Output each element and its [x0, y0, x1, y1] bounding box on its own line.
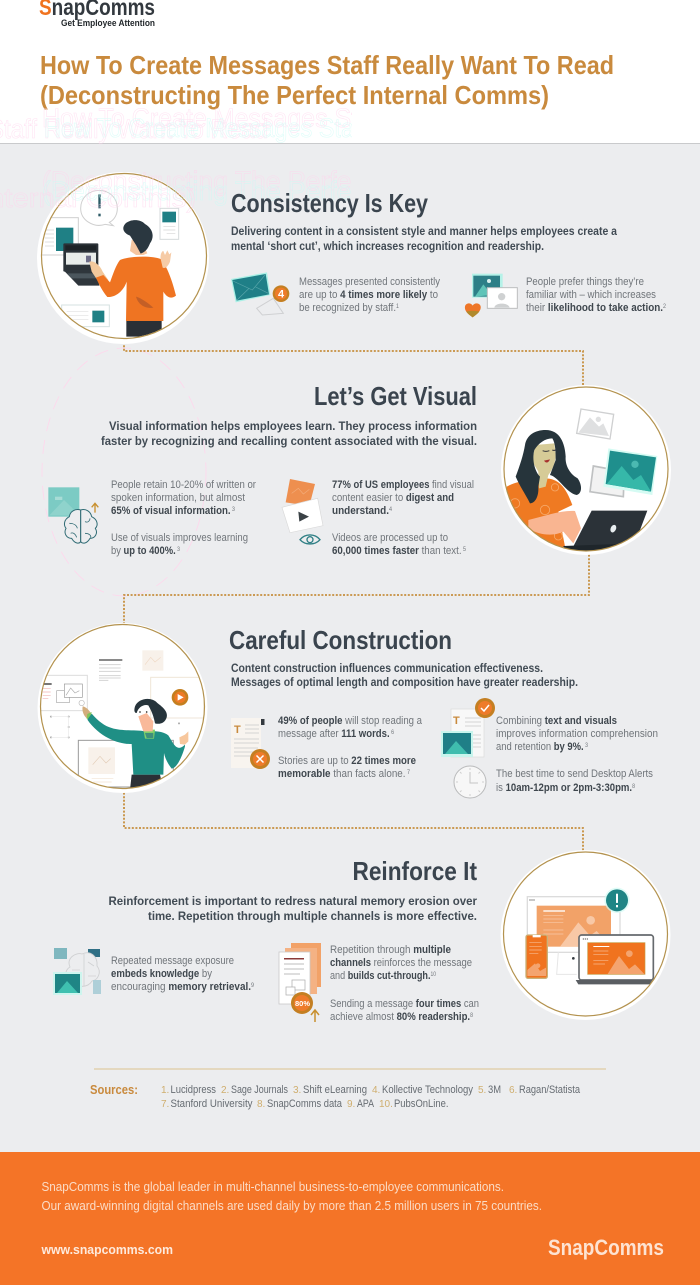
source list: 9. — [347, 1099, 355, 1110]
text: retention stats: People retain 10-20% of written or — [111, 479, 256, 491]
ghost title artifact: (Deconstructing The Perfect — [42, 176, 372, 206]
footer description: Our award-winning digital channels are used daily by more than 2.5 million users in 75 countries. — [42, 1199, 542, 1213]
text: alert timing: 8 — [632, 784, 636, 790]
panel: let's get visual — [48, 381, 671, 557]
title: How To Create Messages Staff Really Want To Read — [40, 50, 614, 80]
source list: SnapComms data — [267, 1098, 342, 1110]
text: video stats: 60,000 times faster than text. — [332, 545, 467, 557]
text: alert timing: The best time to send Desktop Alerts — [496, 768, 653, 780]
heading: Let’s Get Visual — [314, 381, 477, 411]
illustration: man at laptop — [37, 172, 209, 344]
icon: document with x badge: T — [234, 724, 241, 736]
text: memory stat: Repeated message exposure — [111, 955, 234, 967]
text: memory stat: encouraging memory retrieval. — [111, 981, 260, 993]
website: www.snapcomms.com — [41, 1242, 173, 1257]
source list: 4. — [372, 1085, 380, 1096]
source list: 1. — [161, 1085, 169, 1096]
source list: APA — [357, 1098, 375, 1110]
text: video stats: understand. — [332, 505, 389, 517]
text: retention stats: Use of visuals improves learning — [111, 532, 248, 544]
icon: picture, person and heart — [465, 274, 517, 317]
text: retention stats: by up to 400%. — [111, 545, 185, 557]
intro text: faster by recognizing and recalling content associated with the visual. — [101, 434, 477, 448]
text: memory stat: embeds knowledge by — [111, 968, 212, 980]
text: familiarity stat: People prefer things they’re — [526, 276, 644, 288]
text: text and visuals stat: 3 — [584, 743, 589, 749]
text: familiarity stat — [526, 276, 667, 314]
intro text: time. Repetition through multiple channels is more effective. — [148, 909, 477, 923]
source list: PubsOnLine. — [394, 1098, 448, 1110]
text: familiarity stat: their likelihood to take action. — [526, 302, 676, 314]
text: retention stats: spoken information, but almost — [111, 492, 245, 504]
text: repetition stats: and builds cut-through. — [330, 970, 448, 982]
source list: Lucidpress — [170, 1084, 217, 1096]
text: retention stats: 3 — [231, 507, 236, 513]
intro text — [108, 894, 477, 923]
source list: Ragan/Statista — [519, 1084, 580, 1096]
text: reading stats: 49% of people will stop reading a — [278, 715, 423, 727]
intro text — [101, 419, 477, 448]
text: reading stats: message after 111 words. — [278, 728, 397, 740]
text: text and visuals stat — [496, 715, 658, 753]
text: retention stats — [111, 479, 256, 557]
source list: 2. — [221, 1085, 229, 1096]
ghost title artifact: How To Create Messages Sta — [42, 103, 373, 133]
intro text — [231, 224, 617, 253]
icon: document with picture and check badge: T — [453, 715, 460, 727]
logo — [39, 0, 155, 28]
illustration: multi-device screens — [500, 850, 670, 1020]
intro text — [231, 661, 578, 689]
icon: document with x badge — [231, 718, 270, 769]
text: alert timing — [496, 768, 653, 794]
text: alert timing: is 10am-12pm or 2pm-3:30pm. — [496, 782, 651, 794]
text: video stats: 5 — [462, 547, 467, 553]
page background — [0, 143, 700, 1153]
text: reading stats: memorable than facts alone. — [278, 768, 414, 780]
source list: 5. — [478, 1085, 486, 1096]
text: repetition stats: achieve almost 80% readership. — [330, 1011, 481, 1023]
text: repetition stats: Sending a message four times can — [330, 998, 479, 1010]
connector: consistency to visual — [124, 338, 583, 388]
text: video stats: 77% of US employees find visual — [332, 479, 474, 491]
logo: Get Employee Attention — [61, 18, 155, 28]
text: familiarity stat: familiar with – which increases — [526, 289, 656, 301]
text: recognition stat: are up to 4 times more likely to — [299, 289, 438, 301]
text: text and visuals stat: Combining text and visuals — [496, 715, 617, 727]
icon: picture, video and eye — [282, 479, 323, 544]
icon: documents with 80% badge — [279, 943, 321, 1022]
text: reading stats: 7 — [406, 770, 411, 776]
intro text: mental ‘short cut’, which increases recognition and readership. — [231, 239, 544, 253]
text: retention stats: 65% of visual information. — [111, 505, 231, 517]
text: text and visuals stat: and retention by 9%. — [496, 741, 589, 753]
icon: documents with 80% badge: 80% — [295, 999, 310, 1008]
panel: consistency is key — [0, 103, 667, 344]
text: reading stats — [278, 715, 423, 780]
title: (Deconstructing The Perfect Internal Comms) — [40, 80, 549, 110]
text: video stats — [332, 479, 474, 557]
source list: Sage Journals — [231, 1084, 288, 1096]
text: memory stat: 9 — [251, 983, 255, 989]
connector: visual to construction — [124, 551, 589, 625]
icon: envelope with 4 badge — [231, 272, 289, 315]
text: video stats: 4 — [389, 507, 393, 513]
ghost title artifact — [0, 103, 373, 213]
heading: Reinforce It — [352, 856, 477, 886]
heading: Careful Construction — [229, 625, 452, 655]
text: memory stat — [111, 955, 255, 993]
text: video stats: content easier to digest and — [332, 492, 454, 504]
text: retention stats: 3 — [176, 547, 181, 553]
text: repetition stats: 8 — [470, 1013, 474, 1019]
source list: Shift eLearning — [303, 1084, 367, 1096]
panel: reinforce it — [53, 850, 670, 1023]
ghost oval artifact — [42, 348, 206, 596]
source list: Stanford University — [170, 1098, 253, 1110]
text: reading stats: Stories are up to 22 times more — [278, 755, 416, 767]
source list: 10. — [379, 1099, 393, 1110]
text: reading stats: 6 — [390, 730, 395, 736]
illustration: woman presenting — [38, 623, 208, 793]
sources label: Sources: — [90, 1083, 138, 1097]
intro text: Content construction influences communication effectiveness. — [231, 661, 543, 675]
text: repetition stats: 10 — [430, 972, 437, 978]
source list: 8. — [257, 1099, 265, 1110]
text: repetition stats: Repetition through multiple — [330, 944, 451, 956]
heading: Consistency Is Key — [231, 188, 428, 218]
source list: 3. — [293, 1085, 301, 1096]
text: video stats: Videos are processed up to — [332, 532, 448, 544]
intro text: Messages of optimal length and composition have greater readership. — [231, 675, 578, 689]
text: recognition stat: Messages presented consistently — [299, 276, 440, 288]
text: recognition stat — [299, 276, 440, 314]
icon: picture and brain — [48, 487, 98, 543]
icon: document with picture and check badge — [441, 698, 495, 757]
text: recognition stat: 1 — [396, 304, 400, 310]
icon: clock — [454, 766, 486, 798]
panel: sources — [90, 1068, 606, 1110]
icon: envelope with 4 badge: 4 — [278, 289, 285, 301]
source list: Kollective Technology — [382, 1084, 474, 1096]
footer description — [42, 1180, 542, 1213]
source list: 3M — [488, 1084, 501, 1096]
panel: footer — [0, 1152, 700, 1285]
ghost title artifact: (Deconstructing The Perfect — [42, 166, 372, 196]
connector: construction to reinforce — [124, 789, 583, 852]
illustration: woman with laptop — [501, 385, 671, 555]
title — [40, 50, 614, 110]
intro text: Delivering content in a consistent style and manner helps employees create a — [231, 224, 617, 238]
header panel — [0, 0, 700, 144]
text: recognition stat: be recognized by staff. — [299, 302, 409, 314]
text: familiarity stat: 2 — [663, 304, 667, 310]
text: repetition stats — [330, 944, 479, 1023]
icon: brain with pictures — [53, 948, 101, 995]
source list: 7. — [161, 1099, 169, 1110]
panel: careful construction — [38, 623, 658, 798]
ghost title artifact: How To Create Messages Sta — [44, 113, 355, 143]
intro text: Reinforcement is important to redress natural memory erosion over — [108, 894, 477, 908]
source list: 6. — [509, 1085, 517, 1096]
intro text: Visual information helps employees learn. They process information — [109, 419, 477, 433]
text: repetition stats: channels reinforces the message — [330, 957, 472, 969]
text: text and visuals stat: improves information comprehension — [496, 728, 658, 740]
footer logo: SnapComms — [548, 1235, 664, 1260]
source list — [161, 1084, 580, 1110]
footer description: SnapComms is the global leader in multi-channel business-to-employee communications. — [42, 1180, 504, 1194]
